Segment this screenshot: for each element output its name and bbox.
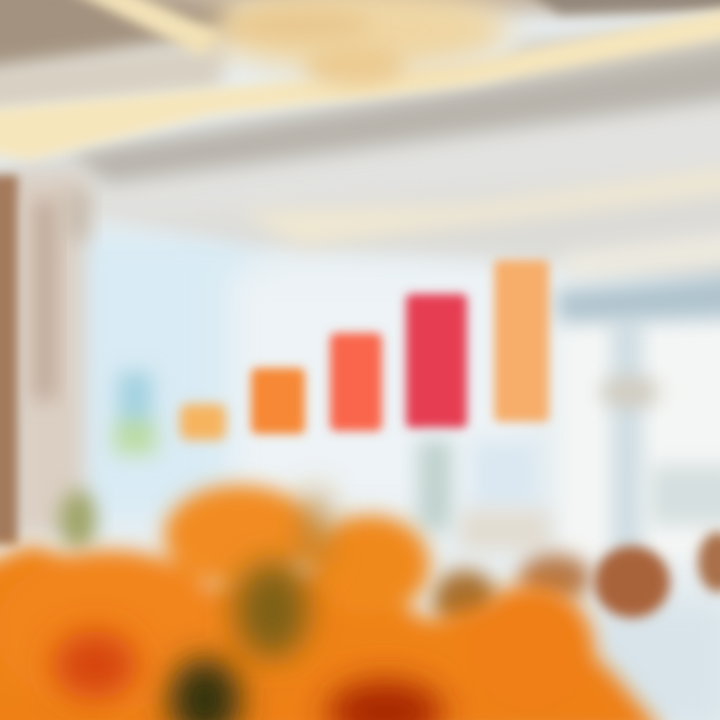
table items beneath the chart — [418, 376, 660, 550]
bar 1: blue and green — [114, 372, 156, 454]
bar 6: peach — [494, 260, 549, 422]
leaf — [60, 490, 96, 550]
window frame band — [555, 274, 720, 322]
chairs at the right — [433, 532, 720, 630]
ceiling light strip: recessed — [240, 165, 720, 245]
ceiling — [0, 0, 720, 322]
bar 5: red — [406, 294, 467, 428]
column on the left — [0, 175, 90, 545]
ceiling light strip: main — [0, 5, 720, 160]
flower centres and dark foliage — [53, 490, 443, 720]
ceiling shadow band — [70, 45, 720, 182]
flower mass — [0, 485, 665, 720]
bar 3: orange — [251, 368, 305, 434]
ceiling light strip: upper left — [70, 0, 225, 55]
bar 4: coral — [330, 333, 382, 431]
chandelier — [210, 0, 510, 85]
bar 2: small orange — [180, 404, 226, 440]
bar chart — [114, 260, 549, 454]
ceiling light strip: lower right — [560, 232, 720, 280]
orange flowers in the foreground — [0, 485, 665, 720]
